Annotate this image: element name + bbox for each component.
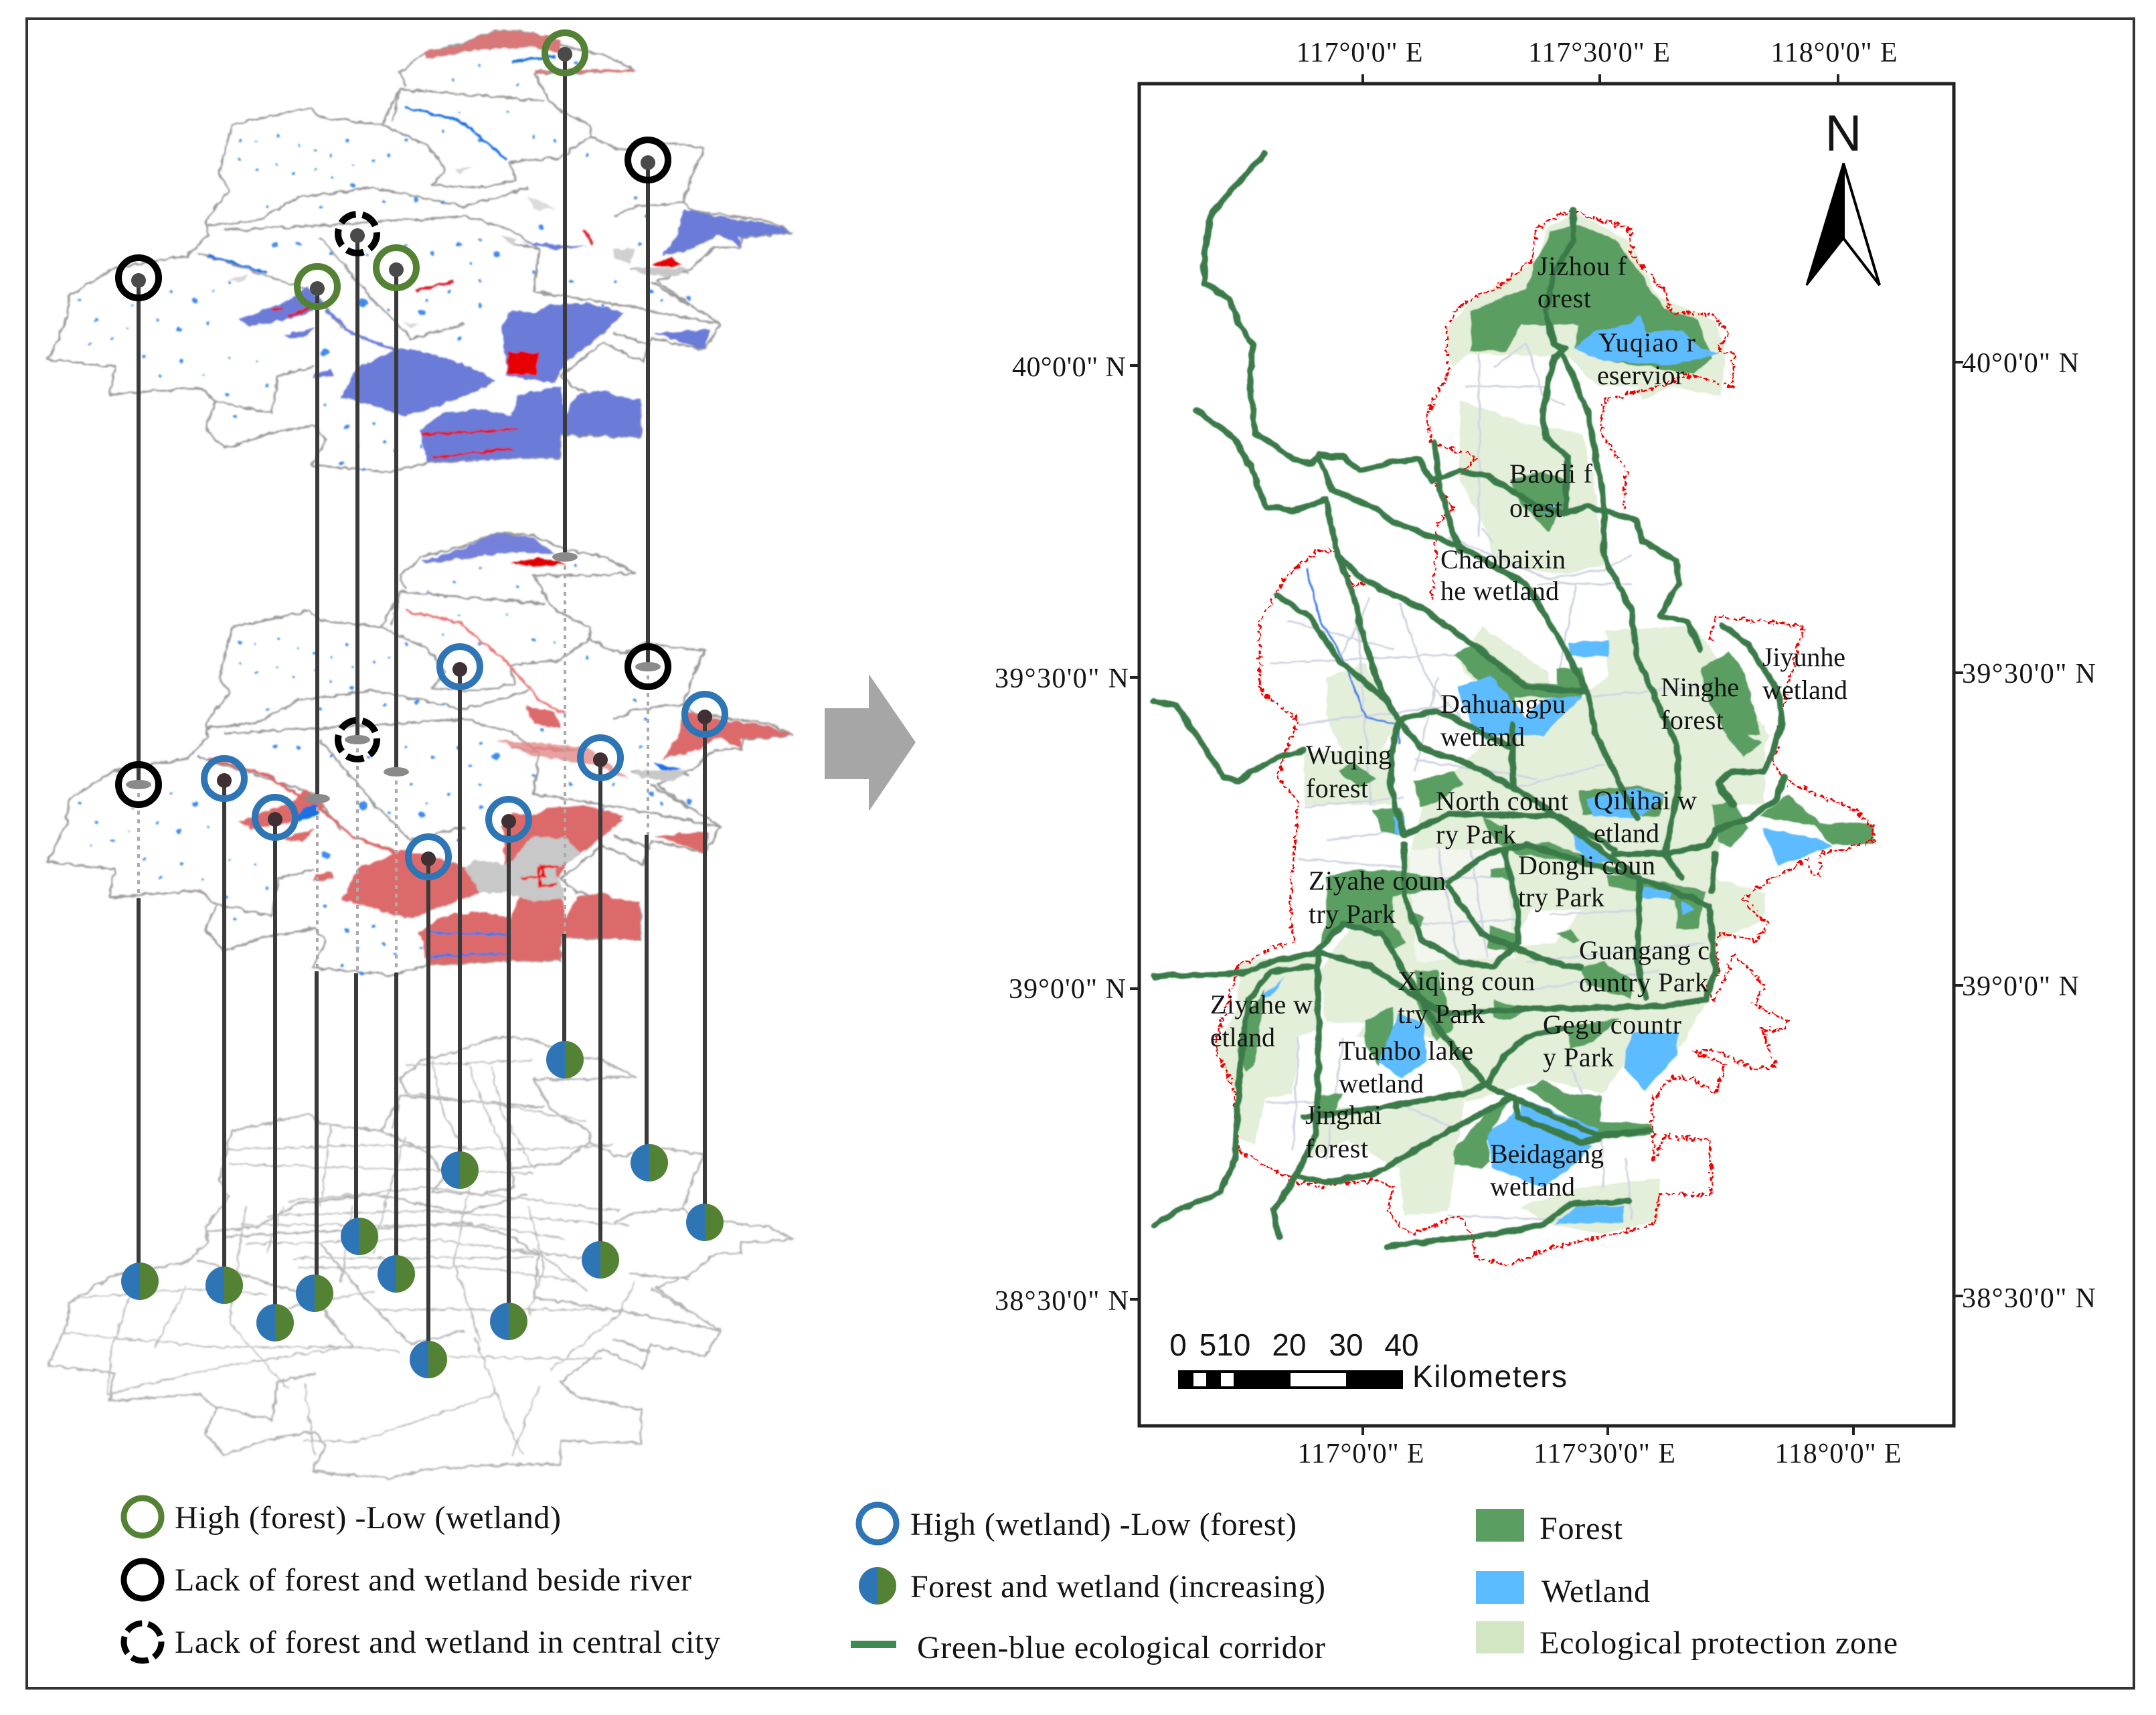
right latitude labels: 40°0'0" N xyxy=(1962,348,2079,379)
map layer: bottom road network xyxy=(48,1037,793,1479)
scale bar: 510 xyxy=(1199,1327,1250,1362)
corridors, south xyxy=(1155,814,1715,1246)
arrow xyxy=(825,674,916,811)
map layer: middle land-use change xyxy=(48,534,793,975)
legend item: lack in central city: Lack of forest and wetland in central city xyxy=(175,1625,720,1660)
place labels: Ziyahe w xyxy=(1210,989,1313,1019)
bottom longitude labels: 117°0'0" E xyxy=(1297,1439,1424,1469)
legend item: corridor: Green-blue ecological corridor xyxy=(917,1630,1325,1665)
place labels: forest xyxy=(1306,773,1368,803)
corridors, north xyxy=(1155,154,1785,1013)
place labels: forest xyxy=(1661,705,1724,735)
place labels: Dongli coun xyxy=(1518,850,1655,880)
green-blue ecological corridors xyxy=(1155,154,1785,1246)
place labels: wetland xyxy=(1762,675,1847,705)
place labels: try Park xyxy=(1398,999,1485,1029)
north arrow xyxy=(1807,105,1880,285)
place labels: etland xyxy=(1594,818,1659,848)
place labels: Ninghe xyxy=(1661,672,1739,702)
place labels: Wuqing xyxy=(1306,740,1392,770)
place labels: Jiyunhe xyxy=(1762,642,1845,672)
scale bar: 30 xyxy=(1329,1327,1363,1362)
place labels: try Park xyxy=(1518,882,1604,912)
panel: three stacked map layers xyxy=(48,31,793,1479)
left latitude labels: 39°30'0" N xyxy=(995,663,1129,694)
place labels: y Park xyxy=(1543,1042,1614,1072)
legend item: wetland xyxy=(1476,1571,1650,1609)
place labels: orest xyxy=(1538,283,1591,313)
bottom longitude labels: 118°0'0" E xyxy=(1775,1439,1901,1469)
legend xyxy=(124,1498,1898,1665)
scale bar: 40 xyxy=(1384,1327,1419,1362)
place labels: ountry Park xyxy=(1579,967,1708,997)
map land cover xyxy=(1216,213,1873,1234)
place labels: Dahuangpu xyxy=(1440,689,1566,719)
legend item: forest and wetland increasing: Forest and wetland (increasing) xyxy=(910,1569,1325,1605)
place labels: Guangang c xyxy=(1579,935,1710,965)
right latitude labels: 38°30'0" N xyxy=(1962,1283,2096,1314)
place labels: try Park xyxy=(1309,899,1396,929)
place labels: Chaobaixin xyxy=(1440,544,1566,574)
place labels: Baodi f xyxy=(1509,459,1593,489)
place labels: ry Park xyxy=(1436,819,1516,849)
right latitude labels: 39°30'0" N xyxy=(1962,659,2096,689)
place labels: forest xyxy=(1305,1133,1368,1163)
left latitude labels: 39°0'0" N xyxy=(1009,974,1126,1005)
top longitude labels: 118°0'0" E xyxy=(1771,37,1897,68)
place labels: Tuanbo lake xyxy=(1339,1036,1473,1066)
place labels: Beidagang xyxy=(1490,1139,1604,1169)
map layer: top land-use change xyxy=(48,31,793,472)
administrative boundary xyxy=(1216,210,1873,1265)
right latitude labels: 39°0'0" N xyxy=(1962,971,2079,1002)
left latitude labels: 40°0'0" N xyxy=(1012,352,1126,383)
left latitude labels: 38°30'0" N xyxy=(995,1286,1129,1317)
place labels: Yuqiao r xyxy=(1598,327,1695,357)
place labels: wetland xyxy=(1440,722,1525,752)
scale bar: Kilometers xyxy=(1412,1359,1567,1394)
legend item: lack beside river: Lack of forest and wetland beside river xyxy=(175,1562,691,1598)
scale bar: 0 xyxy=(1169,1327,1187,1362)
place labels xyxy=(1210,251,1847,1202)
top longitude labels: 117°30'0" E xyxy=(1528,37,1670,68)
map frame xyxy=(1139,84,1954,1426)
top layer pins xyxy=(118,33,668,307)
place labels: wetland xyxy=(1339,1068,1424,1098)
ticks xyxy=(1130,74,1963,1435)
place labels: Xiqing coun xyxy=(1398,966,1535,996)
right latitude labels xyxy=(1962,348,2096,1314)
place labels: he wetland xyxy=(1440,576,1559,606)
place labels: orest xyxy=(1509,493,1562,523)
place labels: Gegu countr xyxy=(1543,1009,1681,1040)
legend item: forest: Forest xyxy=(1540,1511,1623,1546)
place labels: Jizhou f xyxy=(1538,251,1627,281)
north arrow: N xyxy=(1825,105,1861,162)
scale bar xyxy=(1169,1327,1567,1394)
legend item: wetland: Wetland xyxy=(1542,1574,1650,1609)
place labels: North count xyxy=(1436,786,1568,816)
place labels: Jinghai xyxy=(1305,1100,1382,1130)
map lower half land cover xyxy=(1216,736,1873,1234)
top longitude labels xyxy=(1296,37,1897,68)
legend item: ecological protection zone: Ecological protection zone xyxy=(1540,1625,1898,1661)
legend item: high wetland low forest: High (wetland) -Low (forest) xyxy=(910,1507,1297,1542)
panel: corridor map xyxy=(995,37,2096,1469)
legend item: forest xyxy=(1476,1509,1623,1546)
left latitude labels xyxy=(995,352,1129,1317)
place labels: eservior xyxy=(1597,360,1684,390)
scale bar: 20 xyxy=(1272,1327,1307,1362)
half-disc markers on the bottom layer xyxy=(121,1041,724,1378)
place labels: Ziyahe coun xyxy=(1309,866,1446,896)
place labels: etland xyxy=(1210,1022,1275,1052)
middle layer pins xyxy=(118,647,725,877)
pin connector lines xyxy=(126,53,705,1360)
map upper half land cover xyxy=(1271,213,1770,805)
place labels: Qilihai w xyxy=(1594,785,1697,815)
bottom longitude labels: 117°30'0" E xyxy=(1533,1439,1675,1469)
place labels: wetland xyxy=(1490,1171,1575,1202)
bottom longitude labels xyxy=(1297,1439,1901,1469)
top longitude labels: 117°0'0" E xyxy=(1296,37,1423,68)
legend item: high forest low wetland: High (forest) -Low (wetland) xyxy=(175,1500,561,1536)
